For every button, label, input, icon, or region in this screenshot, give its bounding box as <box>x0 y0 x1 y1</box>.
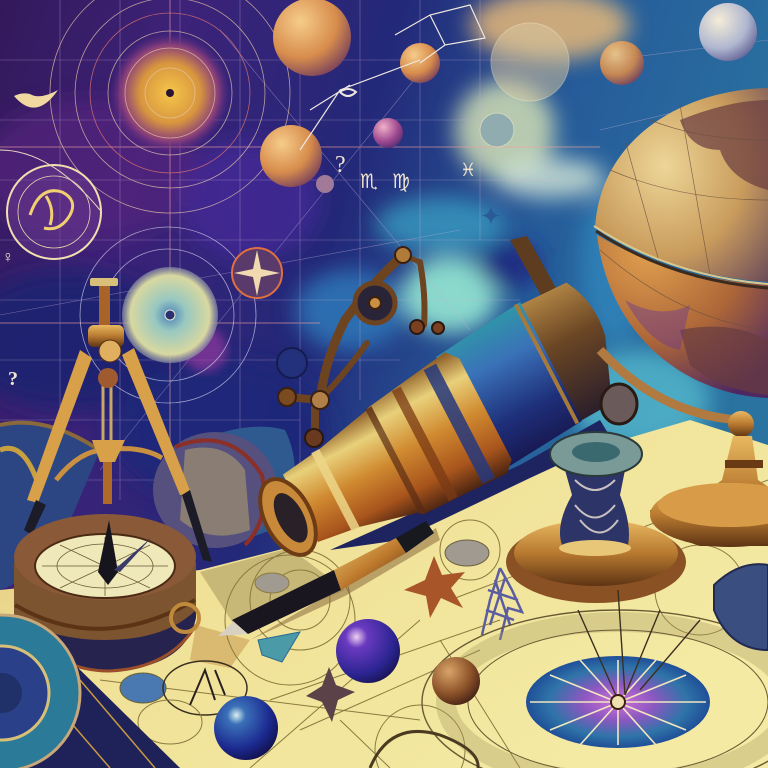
brass arm over telescope <box>278 247 444 447</box>
dial on book <box>0 615 80 768</box>
tripod <box>24 278 212 562</box>
crescent moon top left <box>14 90 58 108</box>
grey star <box>306 667 355 722</box>
globe lower <box>597 235 768 398</box>
globe stand arc <box>600 350 740 420</box>
compass <box>14 514 199 671</box>
astrological glyphs: ♀ <box>2 249 14 266</box>
telescope dark stripe <box>392 387 458 501</box>
astrological glyphs: ✦ <box>480 202 502 231</box>
star dial chart <box>422 590 768 768</box>
telescope blue stripe <box>424 364 495 484</box>
globe upper <box>595 88 768 282</box>
globe meridian ring <box>594 226 768 284</box>
compass arc bottom <box>370 731 478 768</box>
sun with concentric rings <box>50 0 290 213</box>
pen <box>218 521 440 640</box>
small disc on telescope <box>601 384 637 424</box>
nebula clouds <box>0 0 710 500</box>
dark dial in sky by the arm <box>277 348 307 378</box>
telescope rear band <box>503 275 637 430</box>
copper star <box>404 556 465 618</box>
star chart grid <box>0 0 768 500</box>
orbs <box>214 564 768 760</box>
violet orb <box>336 619 400 683</box>
star ornaments <box>306 556 465 722</box>
telescope blue tube <box>431 302 585 474</box>
telescope pale ring <box>311 449 360 531</box>
blue bag <box>714 564 768 650</box>
globe brass stand <box>650 411 768 547</box>
brown orb <box>432 657 480 705</box>
telescope rear collar line <box>516 304 577 423</box>
large globe <box>594 88 768 420</box>
telescope rim line <box>365 406 426 514</box>
telescope middle section <box>360 348 516 517</box>
astrological glyphs: ♏ <box>360 171 378 193</box>
moon circle behind tripod <box>80 227 256 403</box>
telescope <box>229 274 642 583</box>
telescope shadow on table <box>330 420 612 550</box>
astrological glyphs: ? <box>8 368 18 390</box>
small figure <box>482 568 522 640</box>
astrological glyphs <box>2 152 502 390</box>
telescope lens <box>249 470 327 564</box>
telescope front tube <box>274 406 426 562</box>
blue orb <box>214 696 278 760</box>
ornate inkwell <box>506 432 686 603</box>
astrological glyphs: ♓ <box>460 160 476 180</box>
parchment table <box>0 420 768 768</box>
planets <box>260 0 757 193</box>
eyepiece strap <box>510 236 565 306</box>
chart drawings on parchment <box>100 480 768 768</box>
small compass rose in sky <box>232 248 282 298</box>
astrological glyphs: ♍ <box>392 171 410 193</box>
zodiac circle left <box>0 150 101 259</box>
astrological glyphs: ? <box>335 152 346 178</box>
barrel scroll left <box>0 423 100 590</box>
constellation lines <box>300 5 485 150</box>
globe on table <box>153 427 295 548</box>
book corner <box>0 615 180 768</box>
